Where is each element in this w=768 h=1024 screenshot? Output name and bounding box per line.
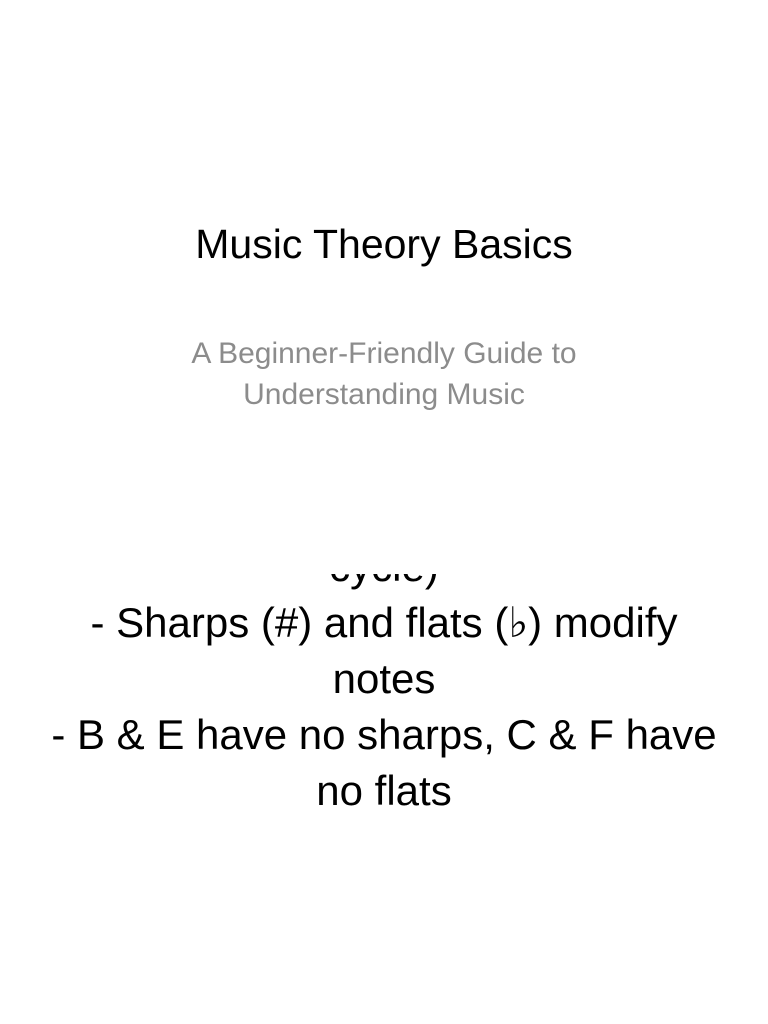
body text block (clipped): - Sharps (#) and flats (♭) modify (90, 599, 678, 646)
body text block (clipped): notes (333, 655, 435, 702)
subtitle (191, 337, 577, 411)
title: Music Theory Basics (195, 221, 573, 267)
body text block (clipped): - B & E have no sharps, C & F have (51, 711, 717, 758)
body text block (clipped): no flats (316, 767, 452, 814)
subtitle: A Beginner-Friendly Guide to (191, 337, 577, 370)
body text block (clipped) (51, 574, 717, 814)
subtitle: Understanding Music (243, 378, 525, 411)
